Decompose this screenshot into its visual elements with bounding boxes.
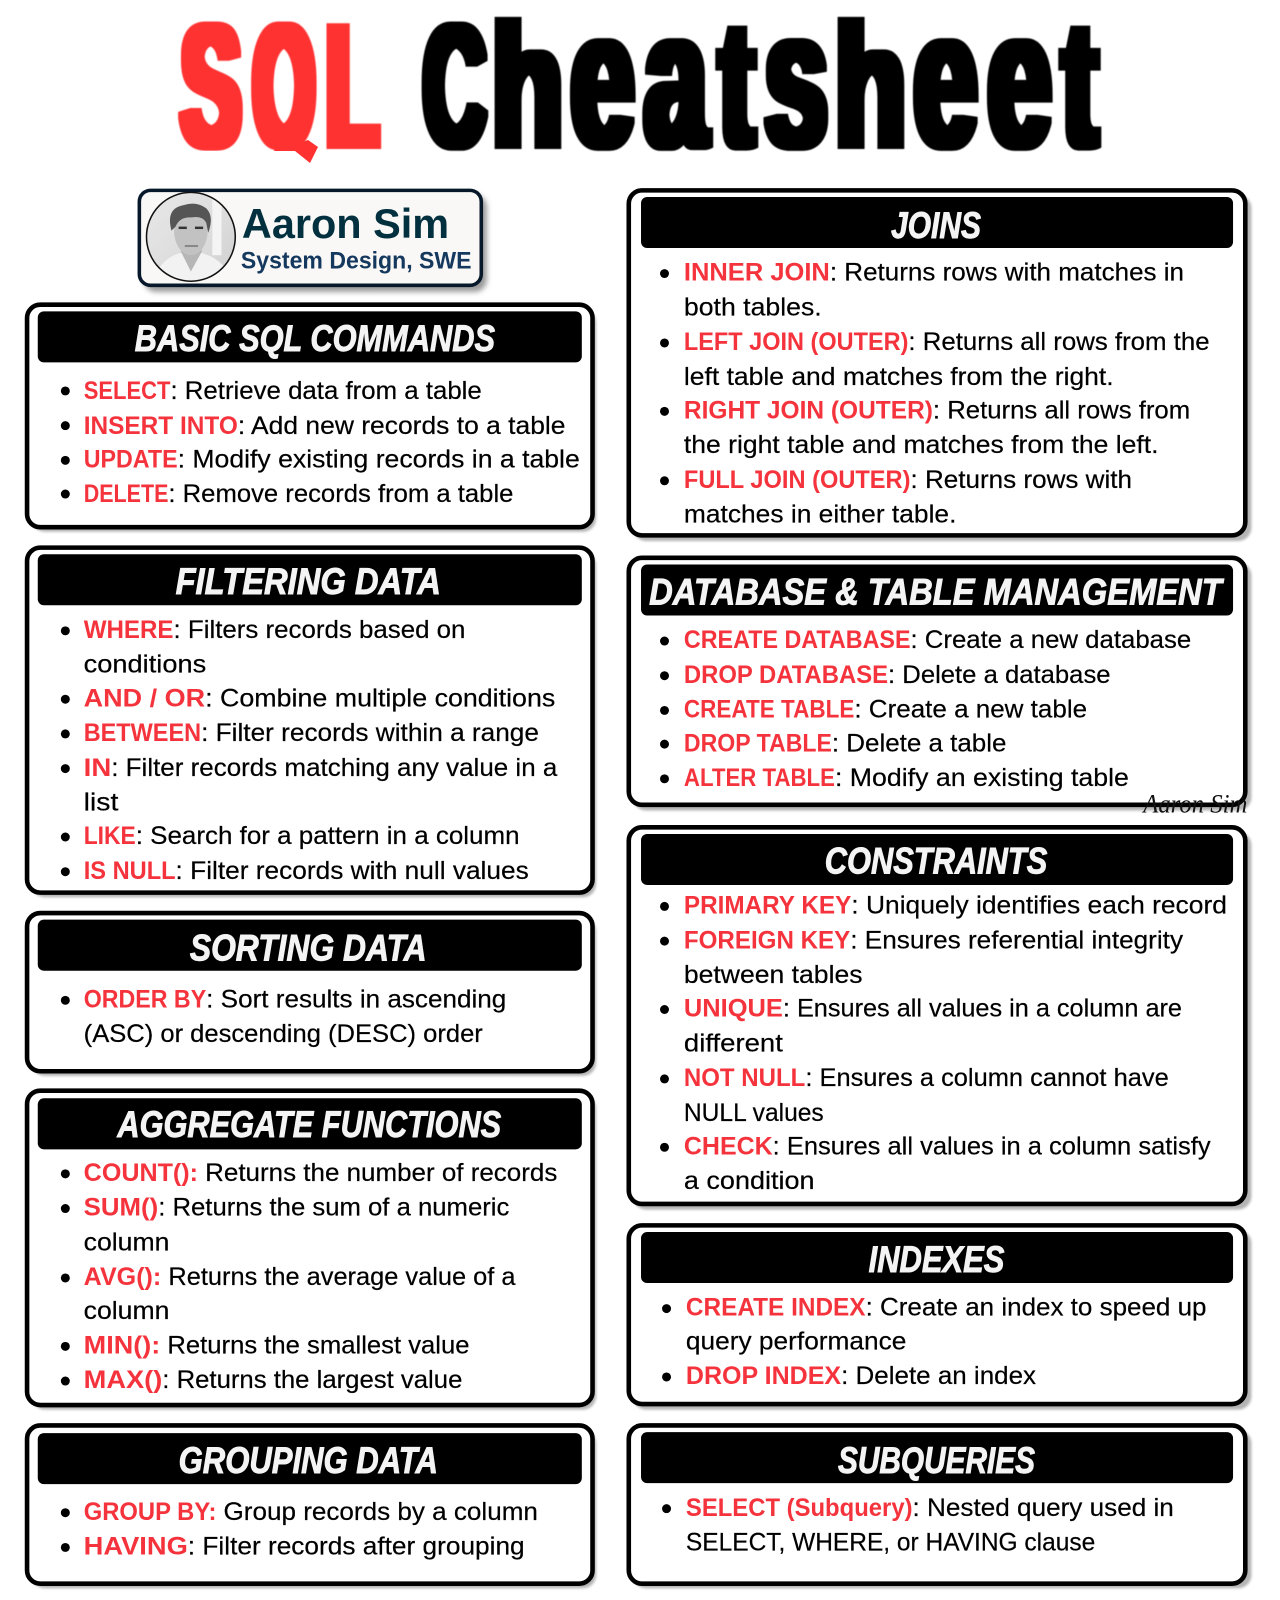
list: aggregates: Returns the smallest value	[167, 1331, 470, 1359]
list: filtering: : Filter records within a range	[201, 719, 539, 747]
heading: sorting data: SORTING DATA	[190, 928, 427, 969]
heading: grouping data: GROUPING DATA	[179, 1440, 438, 1481]
list: basic commands: : Add new records to a table	[238, 412, 565, 440]
list: grouping: HAVING	[84, 1533, 188, 1561]
list: aggregates: AVG():	[84, 1263, 161, 1291]
list: filtering: WHERE	[84, 616, 174, 644]
icon: author photo	[147, 193, 234, 272]
watermark: Aaron Sim	[1141, 789, 1247, 819]
panel: joins	[629, 190, 1251, 541]
list: subqueries	[662, 1494, 1174, 1556]
list: constraints	[660, 892, 1227, 1195]
list: joins: : Returns all rows from	[933, 397, 1190, 425]
list: joins	[660, 259, 1210, 529]
list: filtering: : Filter records with null values	[176, 857, 529, 885]
list: filtering: BETWEEN	[84, 719, 201, 747]
title	[177, 16, 1102, 163]
list: joins: the right table and matches from the left.	[684, 431, 1159, 459]
heading: basic sql commands: BASIC SQL COMMANDS	[135, 318, 495, 359]
panel: filtering data	[27, 548, 596, 897]
list: constraints: NOT NULL	[684, 1064, 805, 1092]
author name: Aaron Sim	[242, 200, 449, 247]
list: constraints: : Ensures a column cannot have	[805, 1064, 1169, 1092]
list: sorting	[61, 985, 506, 1048]
list: database commands: CREATE TABLE	[684, 696, 854, 724]
list: aggregates: : Returns the sum of a numeric	[158, 1194, 509, 1222]
list: constraints: between tables	[684, 961, 863, 989]
list: filtering: : Search for a pattern in a column	[136, 822, 520, 850]
list: database commands: : Create a new table	[854, 696, 1087, 724]
list: aggregates: : Returns the largest value	[162, 1366, 462, 1394]
list: joins: left table and matches from the right.	[684, 363, 1114, 391]
list: database commands: DROP TABLE	[684, 729, 832, 757]
list: joins: matches in either table.	[684, 501, 956, 529]
list: filtering: IN	[84, 754, 111, 782]
list: joins: FULL JOIN (OUTER)	[684, 466, 910, 494]
list: database commands: : Modify an existing table	[835, 764, 1129, 792]
list: basic commands: : Retrieve data from a table	[170, 377, 482, 405]
list: aggregates: Returns the number of records	[205, 1159, 557, 1187]
list: constraints: : Ensures referential integrity	[850, 926, 1184, 954]
list: database commands: : Create a new database	[910, 626, 1191, 654]
list: constraints: NULL values	[684, 1099, 824, 1127]
list: joins: : Returns rows with matches in	[830, 259, 1184, 287]
list: grouping: GROUP BY:	[84, 1498, 216, 1526]
heading: aggregate functions: AGGREGATE FUNCTIONS	[117, 1104, 502, 1145]
list: database commands: ALTER TABLE	[684, 764, 835, 792]
list: filtering: : Combine multiple conditions	[205, 684, 555, 712]
list: grouping	[61, 1498, 538, 1561]
panel: basic sql commands	[27, 305, 596, 532]
list: subqueries: : Nested query used in	[913, 1494, 1174, 1522]
list: constraints: PRIMARY KEY	[684, 892, 852, 920]
list: joins: LEFT JOIN (OUTER)	[684, 328, 908, 356]
list: basic commands: INSERT INTO	[84, 412, 238, 440]
panel: database and table management	[629, 558, 1251, 810]
list: filtering: list	[84, 788, 118, 816]
list: sorting: (ASC) or descending (DESC) order	[84, 1020, 483, 1048]
list: aggregates: MAX()	[84, 1366, 162, 1394]
heading: constraints: CONSTRAINTS	[825, 841, 1048, 882]
list: joins: : Returns all rows from the	[908, 328, 1210, 356]
list: aggregates: MIN():	[84, 1331, 160, 1359]
list: constraints: UNIQUE	[684, 995, 783, 1023]
list: subqueries: SELECT, WHERE, or HAVING clause	[686, 1528, 1095, 1556]
list: constraints: : Uniquely identifies each record	[851, 892, 1227, 920]
panel: grouping data	[27, 1425, 596, 1588]
list: grouping: Group records by a column	[224, 1498, 538, 1526]
panel: indexes	[629, 1225, 1251, 1410]
list: constraints: a condition	[684, 1167, 815, 1195]
panel: subqueries	[629, 1425, 1251, 1588]
list: filtering: AND / OR	[84, 684, 205, 712]
list: basic commands	[61, 377, 580, 508]
list: aggregates: column	[84, 1297, 169, 1325]
list: indexes: : Delete an index	[841, 1362, 1037, 1390]
list: aggregates: COUNT():	[84, 1159, 198, 1187]
list: database commands	[660, 626, 1191, 792]
list: sorting: ORDER BY	[84, 985, 206, 1013]
list: indexes: DROP INDEX	[686, 1362, 841, 1390]
list: basic commands: DELETE	[84, 480, 168, 508]
list: basic commands: UPDATE	[84, 445, 178, 473]
list: aggregates: SUM()	[84, 1194, 158, 1222]
list: database commands: : Delete a table	[832, 729, 1006, 757]
list: indexes: query performance	[686, 1327, 906, 1355]
heading: joins: JOINS	[891, 205, 981, 246]
list: filtering	[61, 616, 557, 885]
panel: aggregate functions	[27, 1091, 596, 1410]
list: joins: RIGHT JOIN (OUTER)	[684, 397, 933, 425]
list: sorting: : Sort results in ascending	[206, 985, 506, 1013]
list: grouping: : Filter records after grouping	[188, 1533, 525, 1561]
list: indexes: CREATE INDEX	[686, 1294, 866, 1322]
heading: subqueries: SUBQUERIES	[838, 1440, 1035, 1481]
list: constraints: : Ensures all values in a column are	[783, 995, 1182, 1023]
list: joins: both tables.	[684, 293, 822, 321]
list: constraints: FOREIGN KEY	[684, 926, 851, 954]
list: joins: INNER JOIN	[684, 259, 830, 287]
list: basic commands: SELECT	[84, 377, 170, 405]
list: subqueries: SELECT (Subquery)	[686, 1494, 913, 1522]
list: constraints: CHECK	[684, 1132, 773, 1160]
list: filtering: LIKE	[84, 822, 136, 850]
list: filtering: conditions	[84, 651, 206, 679]
list: database commands: : Delete a database	[888, 661, 1111, 689]
list: filtering: : Filters records based on	[174, 616, 465, 644]
panel: sorting data	[27, 913, 596, 1076]
list: basic commands: : Modify existing records in a table	[178, 445, 580, 473]
heading: filtering data: FILTERING DATA	[176, 561, 441, 602]
list: aggregates: Returns the average value of a	[168, 1263, 516, 1291]
list: aggregates: column	[84, 1228, 169, 1256]
list: database commands: DROP DATABASE	[684, 661, 888, 689]
list: aggregates	[61, 1159, 557, 1394]
heading: indexes: INDEXES	[869, 1239, 1005, 1280]
list: joins: : Returns rows with	[910, 466, 1132, 494]
author role: System Design, SWE	[241, 247, 472, 274]
list: basic commands: : Remove records from a table	[168, 480, 513, 508]
list: filtering: : Filter records matching any value in a	[111, 754, 557, 782]
list: indexes: : Create an index to speed up	[866, 1294, 1207, 1322]
list: constraints: different	[684, 1029, 783, 1057]
panel: constraints	[629, 827, 1251, 1210]
list: filtering: IS NULL	[84, 857, 176, 885]
list: constraints: : Ensures all values in a column satisfy	[773, 1132, 1211, 1160]
author card	[139, 190, 487, 292]
list: database commands: CREATE DATABASE	[684, 626, 910, 654]
heading: database and table management: DATABASE & TABLE MANAGEMENT	[649, 571, 1225, 612]
list: indexes	[662, 1294, 1207, 1390]
